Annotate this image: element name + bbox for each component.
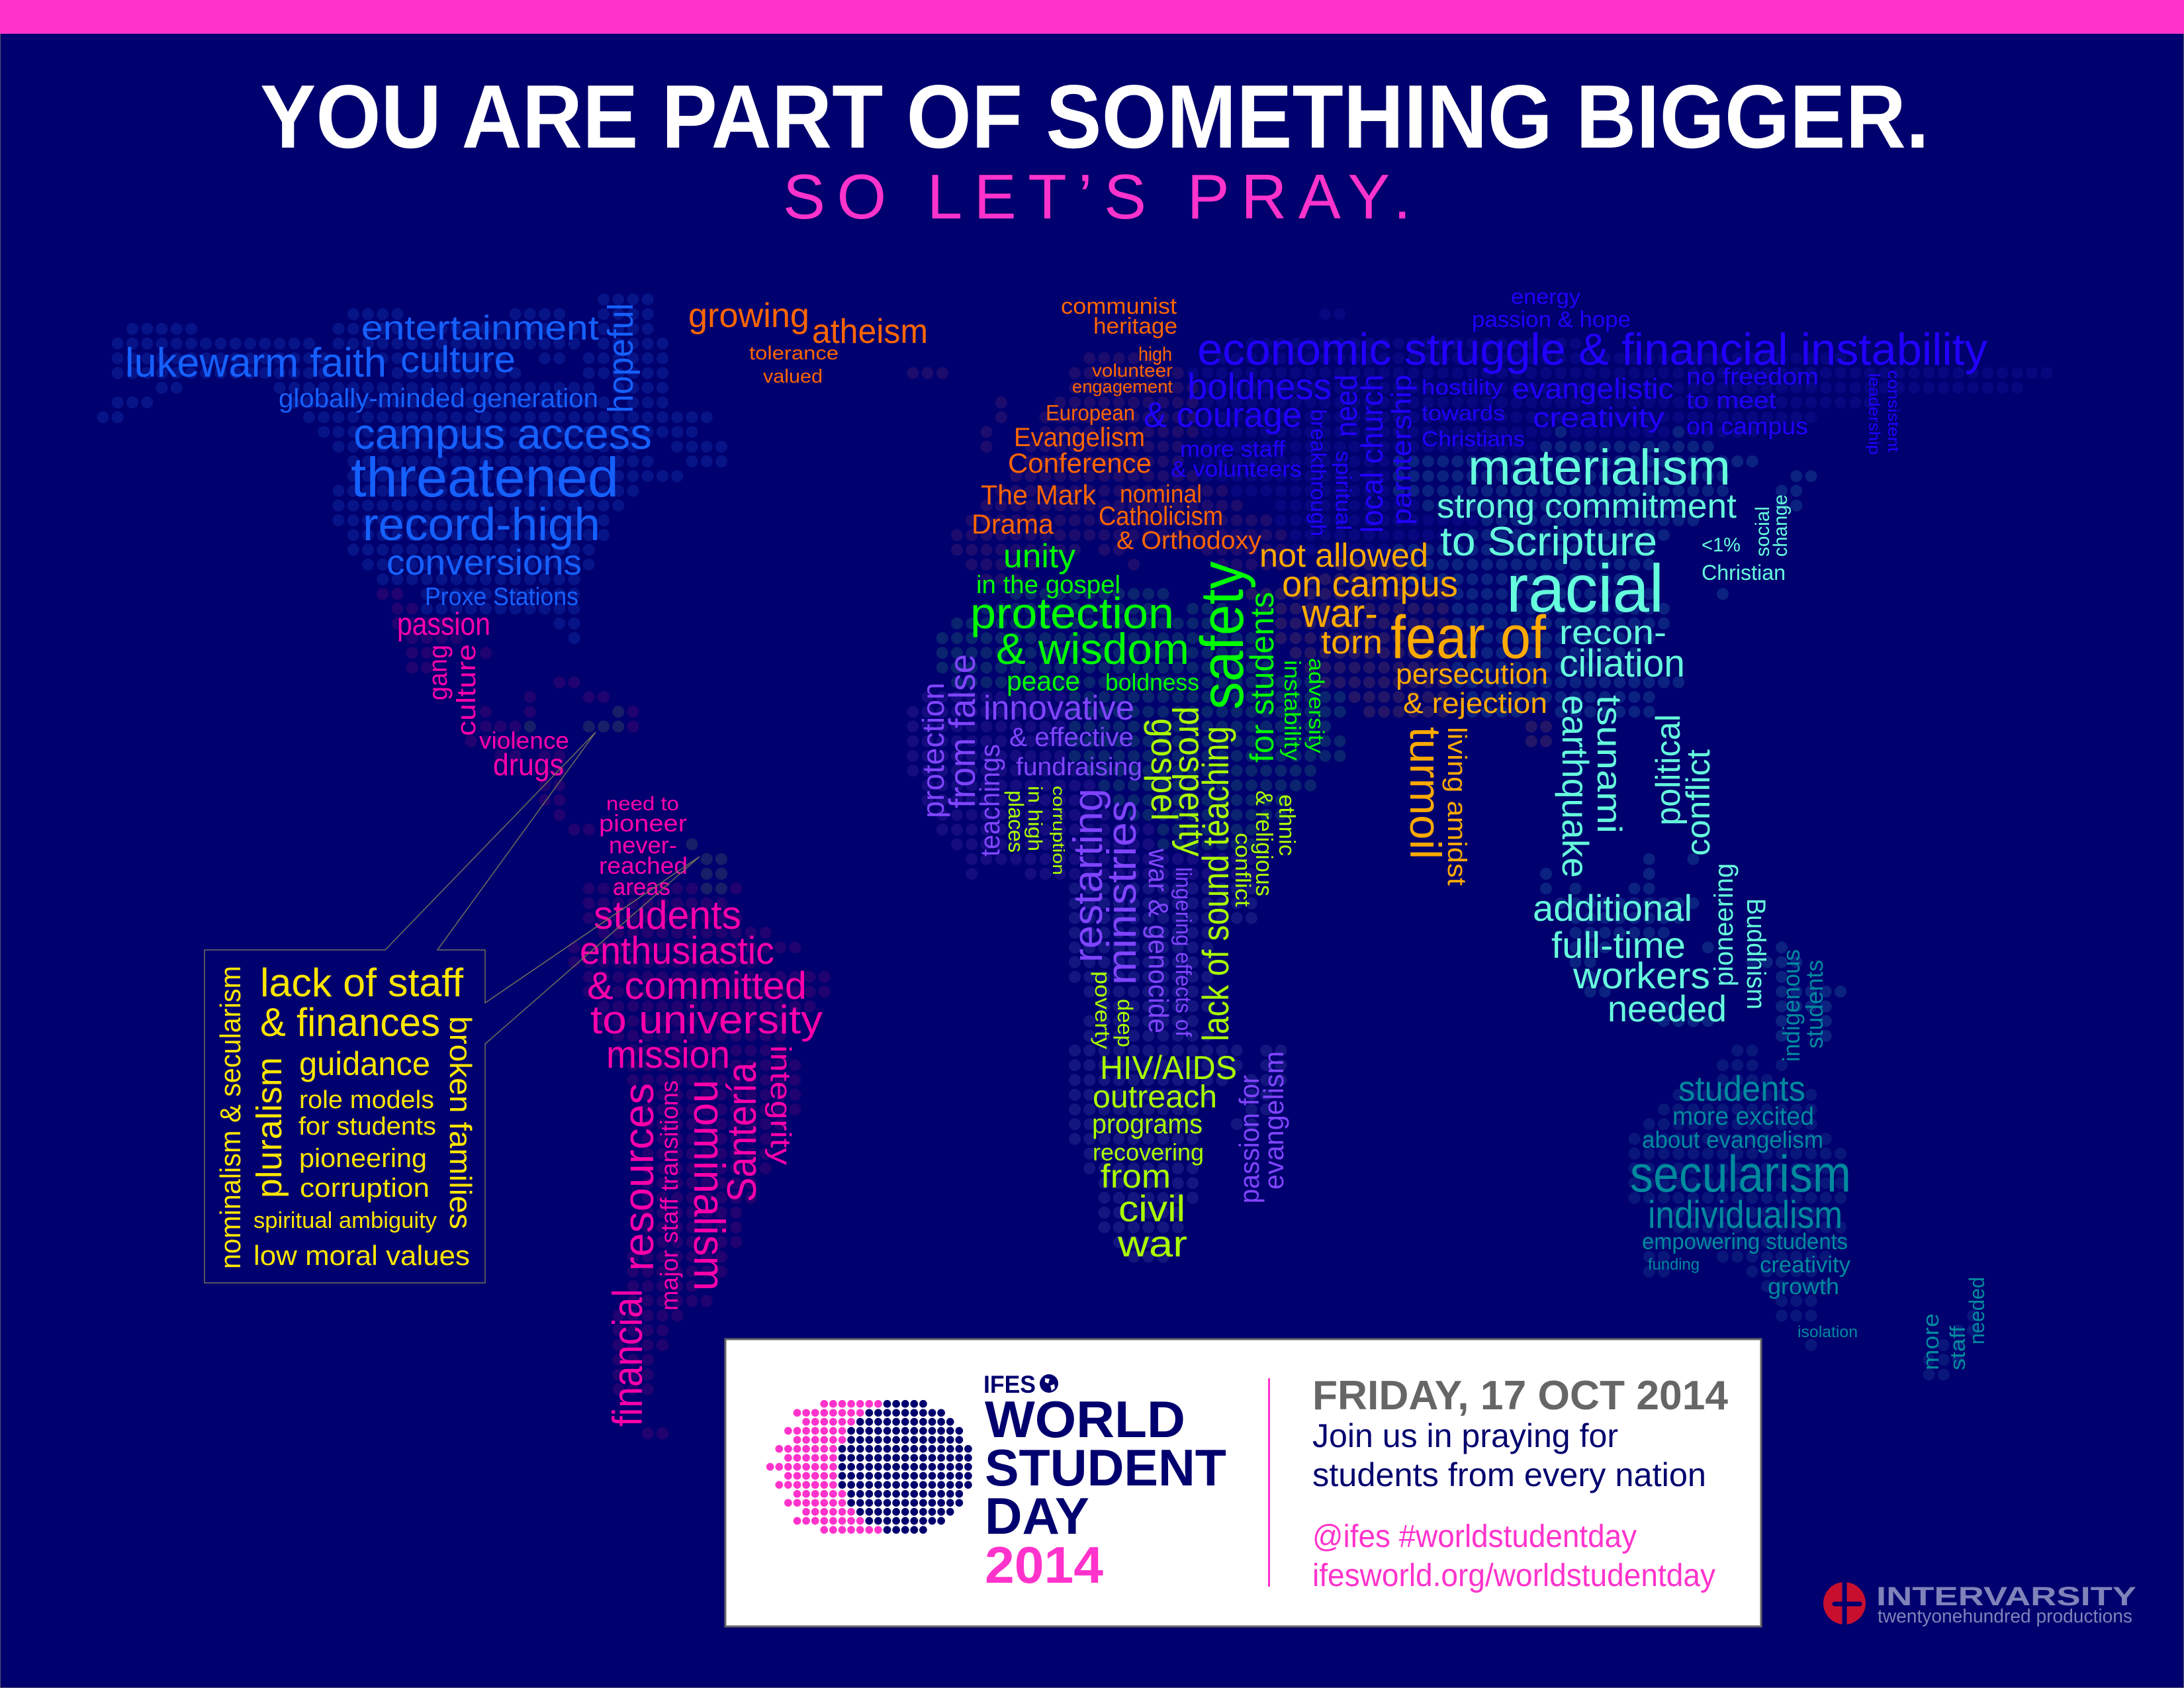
text: IFES: IFES: [983, 1371, 1036, 1398]
word: not allowed: not allowed: [1259, 537, 1428, 574]
dots: South America: [574, 888, 826, 1434]
word: areas: areas: [613, 873, 670, 900]
word: to meet: to meet: [1686, 387, 1776, 414]
word: valued: valued: [763, 366, 823, 387]
word: broken families: broken families: [443, 1016, 478, 1229]
word: local church: local church: [1355, 375, 1389, 533]
callout frame with pointers: [205, 732, 700, 1283]
word: pioneer: pioneer: [599, 810, 687, 837]
word: boldness: boldness: [1105, 669, 1199, 696]
word: empowering students: empowering students: [1642, 1229, 1848, 1254]
word: to Scripture: to Scripture: [1440, 519, 1657, 565]
word: protection: protection: [970, 588, 1174, 637]
word: needed: needed: [1608, 988, 1727, 1029]
word: fear of: fear of: [1390, 604, 1546, 671]
word: for students: for students: [298, 1113, 436, 1141]
words: East and South Asia: [1437, 440, 1792, 1029]
word: living amidst: living amidst: [1442, 727, 1471, 886]
word: The Mark: The Mark: [981, 479, 1097, 510]
word: parntership: parntership: [1386, 375, 1417, 525]
word: recon-: recon-: [1559, 614, 1666, 652]
word: political: political: [1649, 714, 1688, 825]
logo navy dots: [842, 1404, 969, 1530]
dots: Middle East: [1251, 565, 1547, 741]
word: resources: resources: [615, 1083, 662, 1271]
word: pioneering: pioneering: [1709, 863, 1739, 986]
word: more staff: more staff: [1180, 437, 1286, 462]
word: growing: growing: [688, 297, 809, 335]
word: and courage: & courage: [1144, 395, 1302, 435]
word: high: high: [1138, 344, 1172, 365]
word: isolation: isolation: [1797, 1323, 1858, 1341]
text: twentyonehundred productions: twentyonehundred productions: [1878, 1606, 2132, 1627]
word: war-: war-: [1301, 591, 1378, 635]
word: on campus: on campus: [1282, 563, 1458, 604]
word: threatened: threatened: [351, 446, 619, 508]
word: less than 1%: <1%: [1702, 534, 1741, 556]
word: violence: violence: [479, 727, 569, 754]
word: turmoil: turmoil: [1401, 727, 1450, 859]
word: lingering effects of: lingering effects of: [1171, 867, 1196, 1037]
word: and committed: & committed: [587, 964, 807, 1008]
word: leadership: leadership: [1865, 373, 1883, 455]
word: pluralism: pluralism: [250, 1057, 289, 1198]
word: nominal: nominal: [1120, 481, 1202, 508]
word: and Orthodoxy: & Orthodoxy: [1116, 527, 1261, 555]
dots: Australia and New Zealand: [1635, 1051, 1974, 1374]
word: creativity: creativity: [1533, 402, 1664, 433]
word: guidance: guidance: [299, 1045, 430, 1082]
word: additional: additional: [1533, 887, 1692, 929]
word: financial: financial: [605, 1289, 651, 1427]
word: mission: mission: [606, 1033, 730, 1076]
word: secularism: secularism: [1630, 1145, 1851, 1203]
InterVarsity logo: [1823, 1582, 2136, 1627]
word: culture: culture: [452, 644, 481, 736]
word: drugs: drugs: [493, 747, 564, 782]
word: individualism: individualism: [1648, 1194, 1843, 1237]
word: adversity: adversity: [1304, 658, 1328, 753]
word: ethnic: ethnic: [1274, 794, 1299, 856]
word: conversions: conversions: [387, 543, 582, 583]
word: social: social: [1752, 506, 1774, 557]
icon: small globe: [1040, 1374, 1058, 1393]
word: role models: role models: [299, 1086, 434, 1114]
word: racial: racial: [1506, 551, 1664, 626]
word: no freedom: no freedom: [1686, 363, 1819, 390]
icon: red circle mark: [1823, 1582, 1866, 1624]
word: boldness: boldness: [1187, 365, 1332, 407]
word: heritage: heritage: [1093, 314, 1177, 339]
word: Conference: Conference: [1008, 447, 1152, 479]
word: workers: workers: [1572, 955, 1710, 996]
logo wordmark: [983, 1371, 1226, 1594]
word: major staff transitions: major staff transitions: [656, 1080, 683, 1311]
word: and wisdom: & wisdom: [996, 624, 1189, 673]
text: join us: Join us in praying for: [1312, 1417, 1618, 1454]
dots: Southern Africa: [1075, 888, 1283, 1256]
word: conflict: conflict: [1231, 833, 1255, 907]
word: culture: culture: [400, 338, 516, 380]
panel: World Student Day: [725, 1339, 1761, 1626]
word: European: European: [1046, 400, 1135, 425]
word: indigenous: indigenous: [1778, 949, 1805, 1062]
word: conflict: conflict: [1680, 749, 1717, 856]
word: never-: never-: [609, 831, 677, 859]
word: Christians: Christians: [1422, 427, 1525, 451]
dots: North Africa: [942, 594, 1342, 845]
logo pink dots: [770, 1404, 879, 1530]
words: Middle East: [1259, 537, 1548, 886]
word: students: students: [594, 893, 741, 937]
text: DAY: DAY: [985, 1487, 1089, 1545]
word: civil: civil: [1118, 1188, 1185, 1229]
word: campus access: campus access: [353, 409, 652, 458]
word: enthusiastic: enthusiastic: [580, 929, 774, 972]
word: more excited: more excited: [1672, 1103, 1814, 1131]
words: Oceania: [1630, 949, 1989, 1370]
word: evangelistic: evangelistic: [1512, 373, 1674, 405]
word: protection: protection: [916, 682, 950, 818]
word: staff: staff: [1946, 1326, 1970, 1370]
dot world map: [103, 299, 2048, 1434]
dots: Central America: [383, 594, 635, 829]
word: materialism: materialism: [1468, 440, 1731, 496]
word: breakthrough: breakthrough: [1306, 409, 1330, 536]
word: integrity: integrity: [764, 1045, 797, 1165]
word: record-high: record-high: [363, 498, 600, 550]
word: funding: funding: [1648, 1256, 1700, 1274]
subtitle: SO LET’S PRAY.: [783, 162, 1411, 232]
text: hashtag: @ifes #worldstudentday: [1312, 1519, 1637, 1554]
word: hopeful: hopeful: [601, 303, 641, 413]
word: economic struggle and financial instability: economic struggle & financial instability: [1197, 324, 1987, 375]
word: pioneering: pioneering: [299, 1144, 427, 1173]
word: war and genocide: war & genocide: [1143, 848, 1174, 1033]
word: engagement: engagement: [1072, 377, 1173, 397]
word: fundraising: fundraising: [1016, 753, 1142, 781]
top pink bar: [0, 0, 2184, 34]
text: INTERVARSITY: INTERVARSITY: [1876, 1582, 2136, 1611]
word: and effective: & effective: [1009, 723, 1134, 752]
title: YOU ARE PART OF SOMETHING BIGGER.: [260, 66, 1929, 167]
word: tolerance: tolerance: [749, 343, 839, 364]
word: globally-minded generation: globally-minded generation: [279, 384, 598, 413]
word: change: change: [1770, 494, 1792, 557]
word: programs: programs: [1092, 1108, 1203, 1139]
word: passion and hope: passion & hope: [1472, 307, 1631, 332]
word: full-time: full-time: [1551, 924, 1686, 966]
word: needed: needed: [1965, 1277, 1989, 1344]
word: persecution: persecution: [1396, 658, 1548, 690]
word: outreach: outreach: [1093, 1080, 1217, 1115]
word: passion for: passion for: [1234, 1075, 1265, 1203]
word: Drama: Drama: [972, 508, 1054, 539]
icon: dotted globe logo: [770, 1404, 969, 1530]
word: deep: deep: [1113, 999, 1137, 1047]
word: earthquake: earthquake: [1555, 695, 1596, 878]
word: ministries: ministries: [1099, 800, 1145, 985]
word: and volunteers: & volunteers: [1171, 457, 1302, 482]
word: need to: need to: [606, 793, 679, 815]
words: North Asia: [1144, 285, 1987, 536]
word: towards: towards: [1422, 401, 1505, 425]
word: low moral values: low moral values: [253, 1240, 470, 1271]
word: places: places: [1004, 790, 1028, 853]
word: reached: reached: [599, 852, 688, 879]
word: students: students: [1678, 1069, 1805, 1109]
word: entertainment: entertainment: [361, 309, 600, 348]
dots: Europe: [913, 358, 1283, 579]
word: strong commitment: strong commitment: [1437, 487, 1737, 526]
word: hostility: hostility: [1422, 375, 1503, 399]
callout: Caribbean: [205, 732, 700, 1283]
panel background: [725, 1339, 1761, 1626]
text: date: FRIDAY, 17 OCT 2014: [1312, 1373, 1729, 1419]
word: from: from: [1101, 1158, 1171, 1195]
word: from false: from false: [941, 654, 983, 808]
word: communist: communist: [1061, 294, 1177, 319]
word: gospel: gospel: [1144, 718, 1185, 821]
word: Christian: Christian: [1702, 561, 1786, 585]
word: HIV/AIDS: HIV/AIDS: [1100, 1049, 1237, 1086]
dots: West and Central Africa: [913, 697, 1253, 874]
word: volunteer: volunteer: [1092, 360, 1173, 381]
word: teachings: teachings: [974, 744, 1005, 857]
word: safety: safety: [1189, 561, 1256, 710]
text: students from every nation: students from every nation: [1312, 1456, 1706, 1493]
word: ciliation: ciliation: [1559, 642, 1685, 685]
words: North Africa: [970, 538, 1328, 763]
word: in high: in high: [1024, 786, 1046, 851]
word: students: students: [1801, 960, 1828, 1049]
word: nominalism and secularism: nominalism & secularism: [214, 966, 247, 1269]
word: nominalism: nominalism: [685, 1080, 734, 1291]
word: lack of staff: lack of staff: [260, 961, 463, 1005]
word: innovative: innovative: [983, 689, 1134, 727]
word: and religious: & religious: [1251, 790, 1278, 896]
word: and rejection: & rejection: [1403, 687, 1547, 720]
word: peace: peace: [1007, 665, 1080, 696]
word: evangelism: evangelism: [1258, 1051, 1289, 1190]
word: creativity: creativity: [1760, 1252, 1850, 1278]
word: spiritual: spiritual: [1332, 451, 1355, 530]
dots: Caribbean callout area: [530, 712, 723, 888]
word: gang: gang: [424, 645, 453, 700]
dots: Russia and North Asia: [1193, 314, 2048, 549]
word: restarting: restarting: [1066, 788, 1111, 962]
word: and finances: & finances: [260, 1000, 440, 1045]
word: Buddhism: Buddhism: [1741, 898, 1770, 1009]
words: North America: [125, 303, 652, 611]
dots: South and East Asia: [1399, 432, 1842, 1036]
word: for students: for students: [1244, 592, 1281, 763]
word: growth: growth: [1768, 1274, 1839, 1299]
word: lack of sound teaching: lack of sound teaching: [1195, 726, 1236, 1041]
text: 2014: 2014: [985, 1536, 1103, 1594]
word: atheism: atheism: [812, 312, 928, 351]
word: recovering: recovering: [1093, 1139, 1204, 1166]
word: need: need: [1329, 375, 1363, 437]
word: tsunami: tsunami: [1590, 695, 1628, 833]
word: spiritual ambiguity: spiritual ambiguity: [253, 1208, 437, 1233]
word: Catholicism: Catholicism: [1099, 502, 1223, 531]
word: lukewarm faith: lukewarm faith: [125, 340, 387, 386]
words: Europe: [688, 294, 1261, 555]
word: Santeria: Santería: [719, 1062, 765, 1202]
divider: [1268, 1378, 1270, 1587]
text: url: ifesworld.org/worldstudentday: [1312, 1558, 1715, 1593]
word: war: war: [1117, 1223, 1187, 1264]
words: Africa purple: [916, 654, 1289, 1203]
text: STUDENT: STUDENT: [985, 1438, 1226, 1497]
word: poverty: poverty: [1091, 971, 1115, 1049]
word: unity: unity: [1003, 538, 1075, 575]
word: torn: torn: [1321, 624, 1383, 661]
word: energy: energy: [1511, 285, 1580, 308]
words: Central and South America: [397, 607, 823, 1427]
word: about evangelism: about evangelism: [1642, 1126, 1823, 1153]
word: Evangelism: Evangelism: [1014, 423, 1145, 452]
text: WORLD: WORLD: [985, 1390, 1185, 1448]
word: Proxe Stations: Proxe Stations: [425, 583, 578, 611]
dots: North America: [103, 299, 723, 638]
word: corruption: corruption: [1049, 786, 1068, 875]
word: to university: to university: [590, 998, 823, 1042]
word: prosperity: prosperity: [1171, 706, 1211, 857]
word: on campus: on campus: [1686, 412, 1808, 440]
word: more: more: [1919, 1313, 1944, 1370]
word: consistent: consistent: [1884, 370, 1902, 452]
word: instability: instability: [1279, 660, 1304, 761]
word: in the gospel: in the gospel: [976, 571, 1120, 599]
word: corruption: corruption: [300, 1174, 430, 1203]
words: Africa lime: [1004, 706, 1299, 1264]
callout words: [214, 961, 478, 1271]
word: passion: passion: [397, 607, 490, 642]
